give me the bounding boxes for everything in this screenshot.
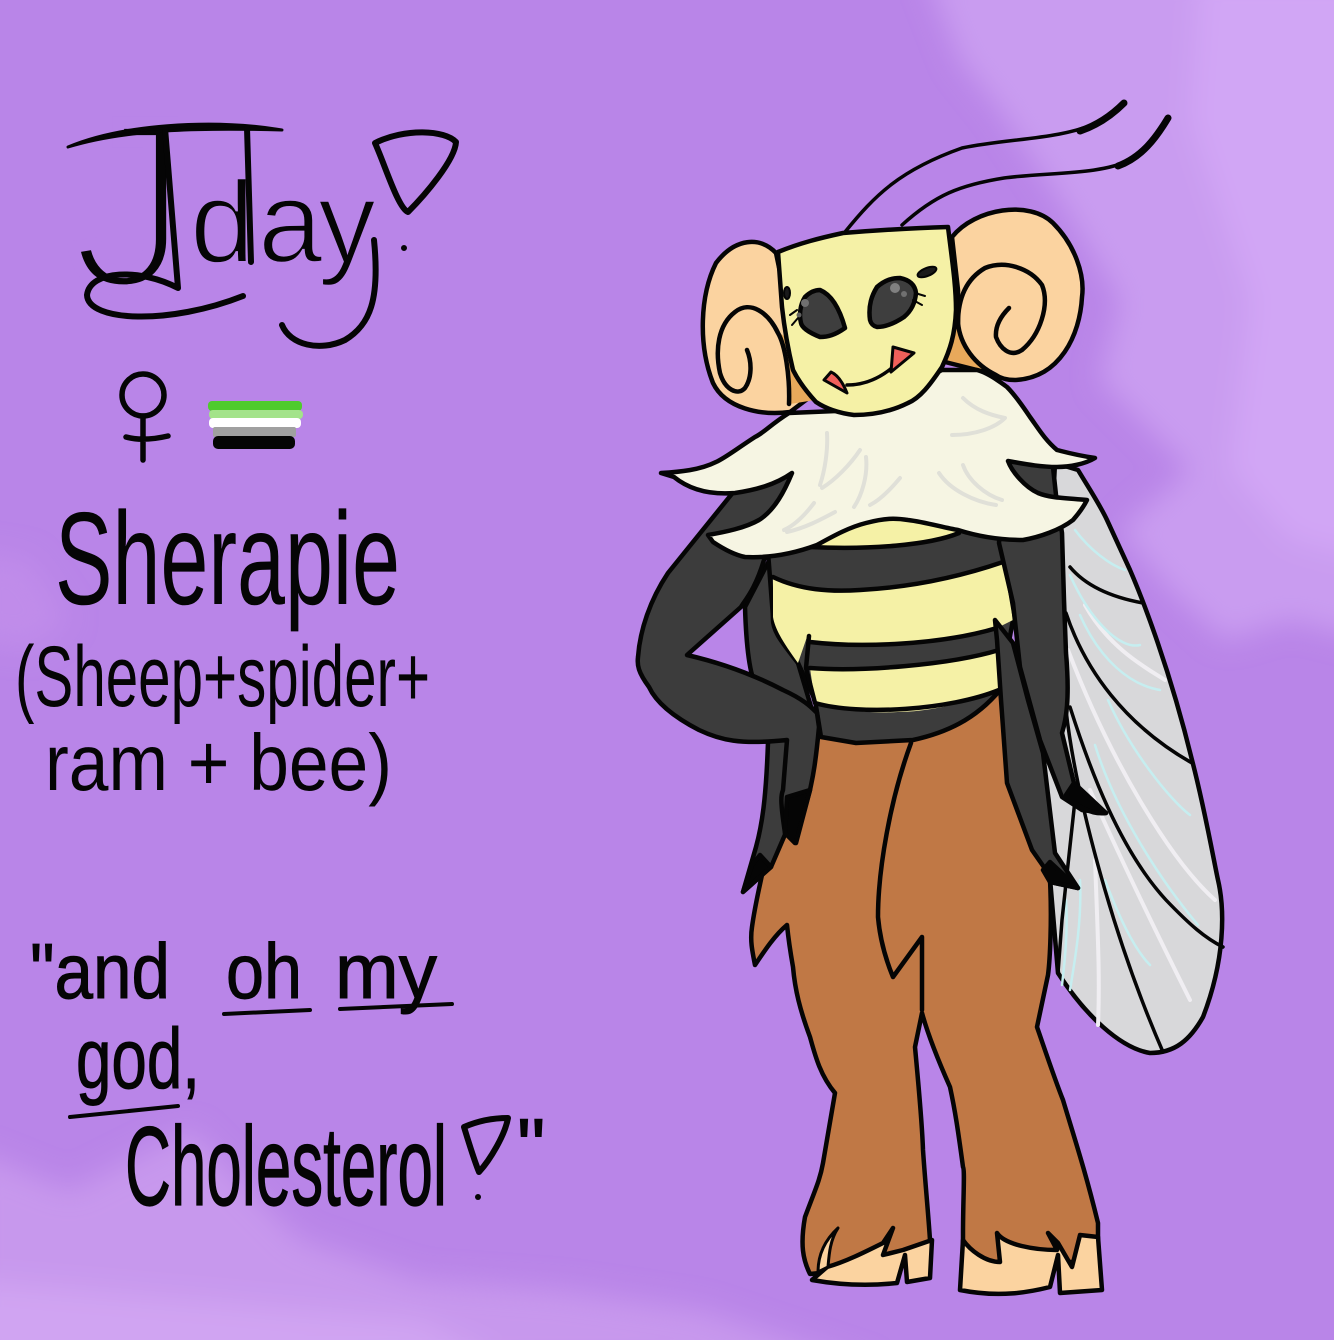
arm on hip — [638, 470, 819, 892]
character — [638, 103, 1223, 1294]
quote: god, — [76, 1012, 200, 1107]
mouth and fangs — [847, 367, 893, 385]
left horn — [703, 242, 815, 413]
antennae — [845, 103, 1168, 232]
eyes — [784, 265, 938, 337]
legs — [751, 690, 1098, 1274]
right lower arm — [995, 620, 1078, 888]
right upper arm — [999, 455, 1106, 813]
arm strip behind the hip arm — [743, 555, 815, 892]
name heading: Jday — [68, 71, 376, 346]
species description: (Sheep+spider+ — [15, 629, 430, 725]
icon: aromantic flag — [208, 401, 303, 449]
quote — [30, 927, 545, 1229]
species description — [15, 629, 430, 807]
fluffy collar — [661, 370, 1095, 557]
name heading: Jday: day — [190, 157, 376, 287]
quote: oh — [226, 927, 302, 1015]
species name: Sherapie — [55, 485, 400, 632]
right horn — [945, 210, 1083, 380]
name heading: Jday: J — [70, 71, 190, 339]
heading flourishes — [68, 124, 282, 147]
quote: Cholesterol — [125, 1104, 447, 1229]
head — [778, 227, 956, 415]
quote: my — [335, 927, 437, 1015]
icon: female symbol — [122, 374, 168, 460]
wing — [1040, 463, 1223, 1053]
quote: " — [517, 1102, 545, 1191]
hooves — [812, 1228, 1102, 1294]
species description: ram + bee) — [45, 718, 392, 807]
torso with stripes — [768, 505, 1013, 743]
heart exclamation mark — [375, 132, 456, 250]
quote: "and — [30, 927, 170, 1015]
